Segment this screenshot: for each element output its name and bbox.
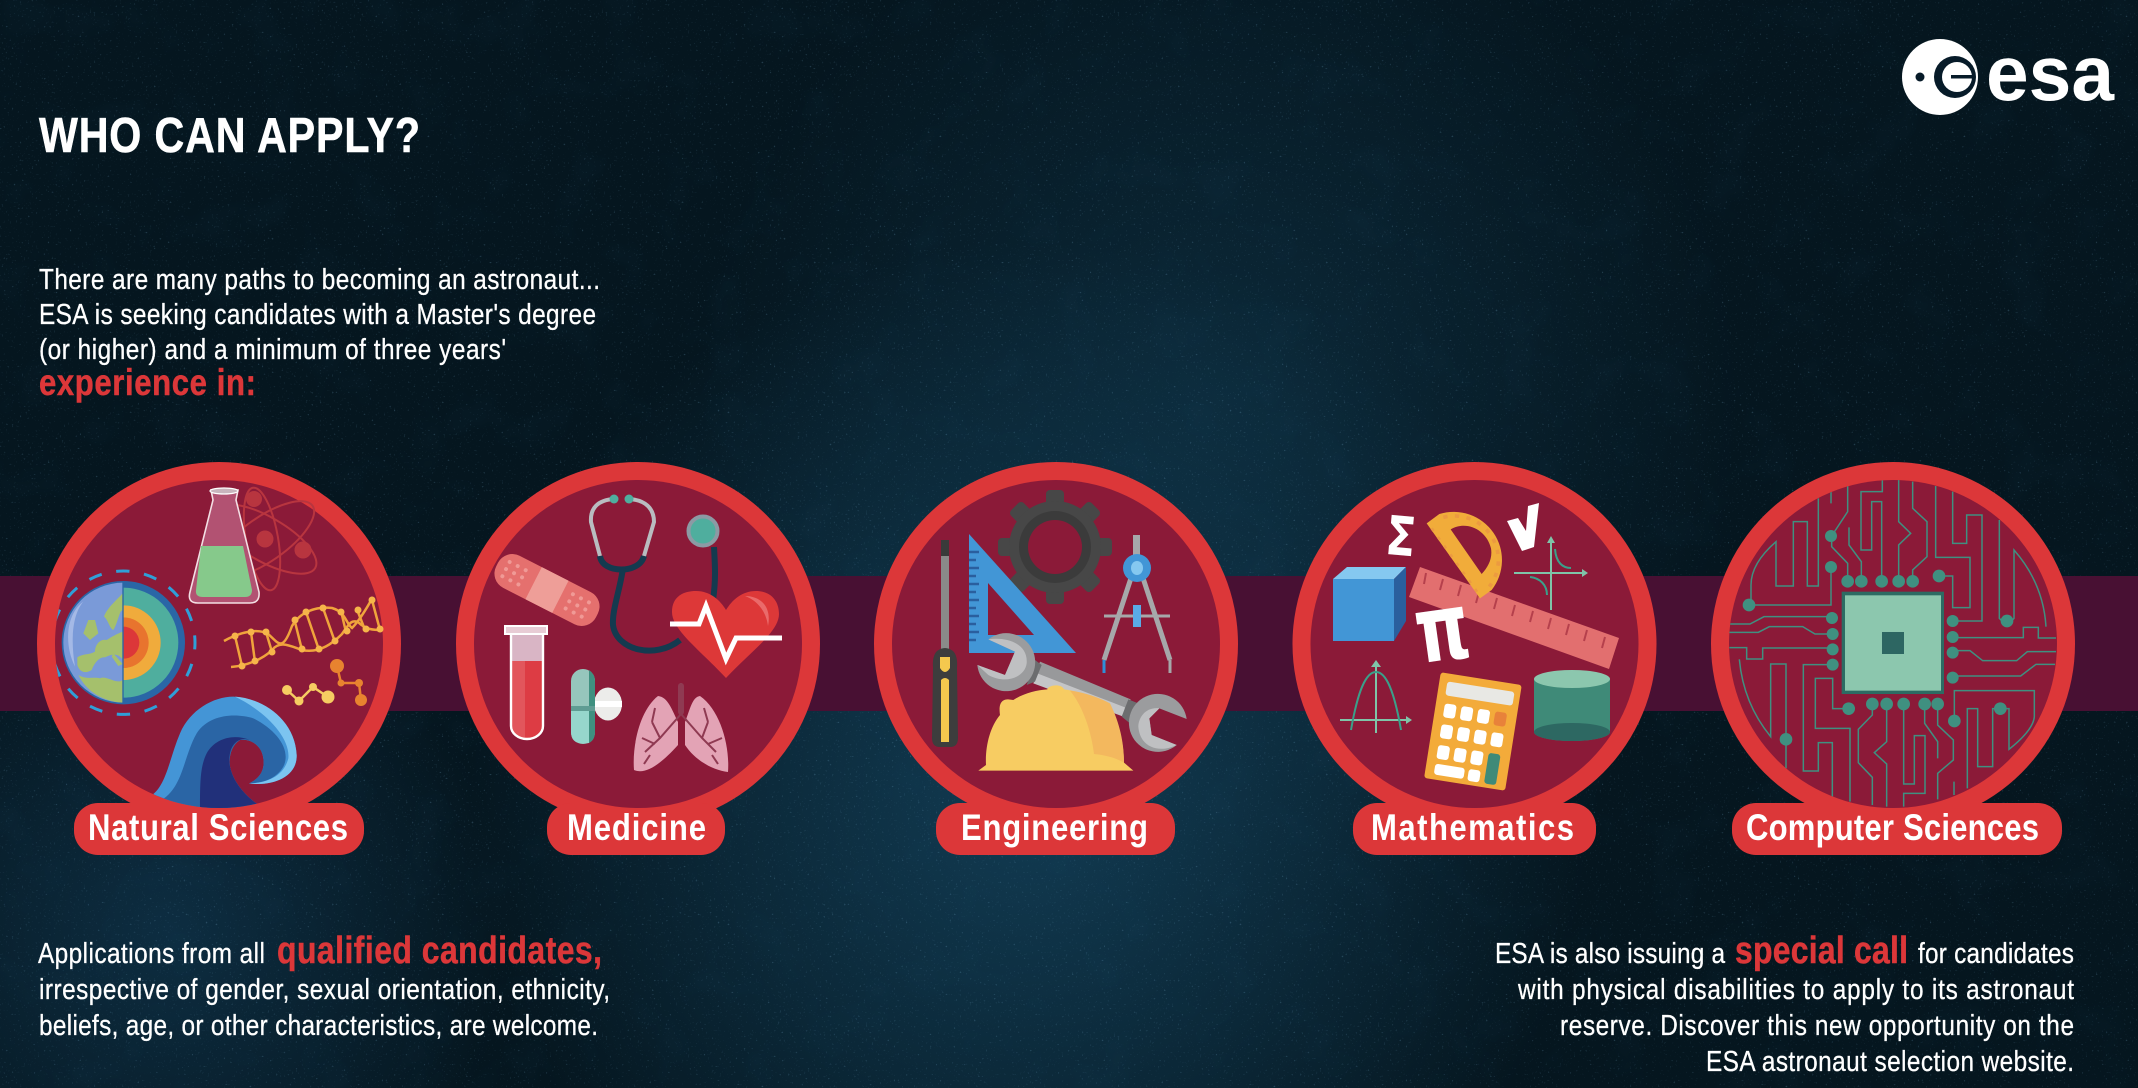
text block: special call: with physical disabilities to apply to its astronaut [1517,973,2075,1005]
icon: lungs [634,683,728,772]
ESA logo [1902,29,2115,117]
hard hat [978,685,1133,771]
icon: heart with pulse [670,591,782,678]
icon: wave [153,697,297,812]
icon: set square [969,534,1076,653]
text block: special call: reserve. Discover this new opportunity on the [1560,1009,2074,1041]
intro paragraph: experience in: [39,363,256,404]
icon: DNA helix [224,596,384,670]
icon: molecules [282,659,367,706]
icon: atom [204,485,326,593]
text block: qualified candidates [38,929,610,1041]
icon: sigma symbol: Σ [1383,504,1419,569]
intro paragraph: ESA is seeking candidates with a Master's degree [39,298,596,330]
panel: Medicine [456,462,820,855]
icon: cylinder [1534,670,1610,741]
label: Natural Sciences: Natural Sciences [88,808,348,849]
icon: pills [571,669,622,744]
panel: Computer Sciences [1711,462,2075,855]
wrench [977,633,1187,752]
text block: special call: for candidates [1918,937,2074,969]
label: Mathematics: Mathematics [1371,808,1574,849]
label: Engineering: Engineering [961,808,1148,849]
label: Medicine: Medicine [567,808,706,849]
icon: gear [998,490,1112,604]
icon: stethoscope [591,494,718,651]
icon: wrench and hard hat [977,633,1187,771]
icon: protractor [1427,512,1502,598]
horizontal band [0,576,2138,711]
icon: compass [1104,535,1170,673]
text block: special call: special call [1735,929,1908,972]
text block: special call: ESA astronaut selection website. [1706,1045,2074,1077]
icon: flask [189,488,259,603]
icon: ruler [1409,567,1619,669]
title: WHO CAN APPLY? [39,108,420,163]
icon: blue cube [1333,567,1406,641]
icon: screwdriver [932,540,958,747]
icon: root symbol [1507,503,1539,551]
text block: qualified candidates: irrespective of gender, sexual orientation, ethnicity, [39,973,610,1005]
text block: special call: ESA is also issuing a [1495,937,1725,969]
text block: special call [1495,929,2075,1077]
text block: qualified candidates: Applications from all [38,937,265,969]
text block: qualified candidates: beliefs, age, or other characteristics, are welcome. [39,1009,598,1041]
intro paragraph: There are many paths to becoming an astronaut... [39,263,600,295]
icon: hyperbola graph [1514,536,1588,610]
icon: circuit board [1729,480,2056,807]
label: Computer Sciences: Computer Sciences [1746,808,2039,849]
icon: pi symbol: π [1408,572,1476,685]
icon: bandage [489,549,605,631]
intro paragraph: (or higher) and a minimum of three years' [39,333,506,365]
panel: Mathematics [1292,462,1656,855]
intro paragraph [39,263,600,404]
ESA logo: esa [1986,29,2115,117]
icon: test tube [505,626,547,739]
text block: qualified candidates: qualified candidates, [277,929,602,972]
panel: Engineering [874,462,1238,855]
icon: earth cross-section [52,571,195,714]
icon: calculator [1424,672,1522,791]
icon: parabola graph [1340,660,1412,733]
panel: Natural Sciences [37,462,401,855]
